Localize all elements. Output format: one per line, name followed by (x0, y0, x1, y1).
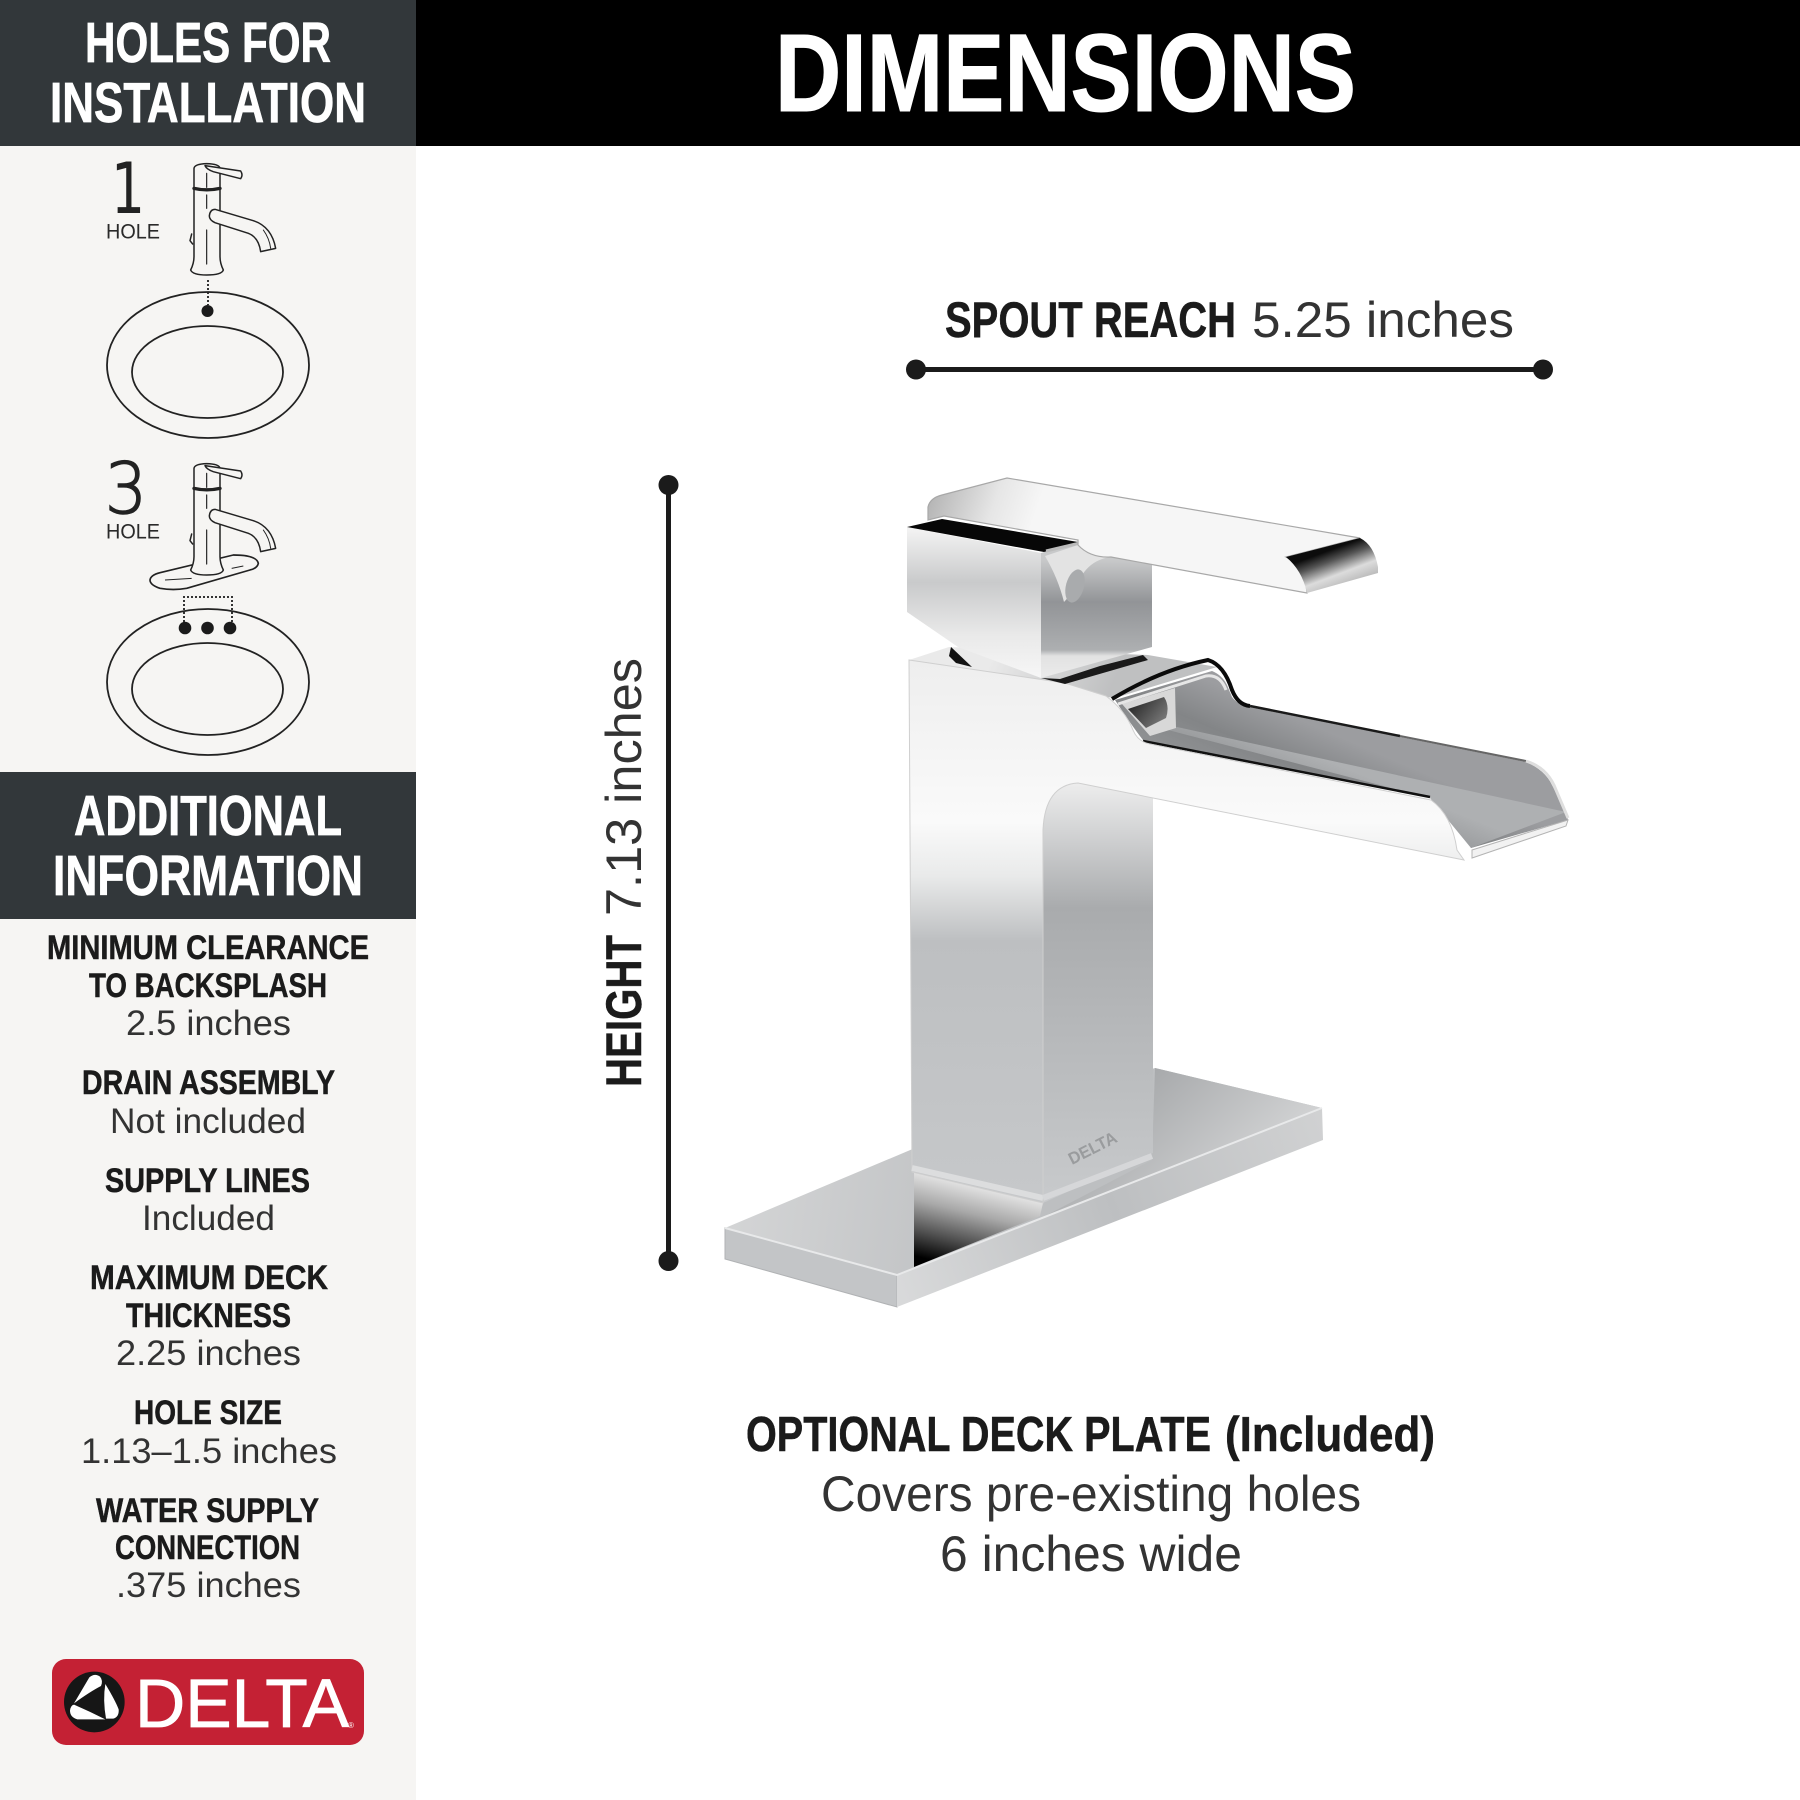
dimension: height line (658, 475, 678, 1271)
logo: delta: DELTA (135, 1665, 349, 1742)
connector: dotted bracket (184, 597, 232, 622)
heading: additional information: INFORMATION (53, 844, 363, 908)
connector: dotted drop line (207, 280, 209, 305)
handle block right face (1041, 542, 1152, 678)
text block: supply lines: SUPPLY LINES (105, 1162, 310, 1200)
text block: water supply connection: CONNECTION (115, 1529, 300, 1567)
base collar (912, 1156, 1152, 1198)
handle neck (1045, 545, 1111, 602)
handle block front face (907, 527, 1041, 678)
banner: dimensions title: DIMENSIONS (775, 12, 1356, 135)
brand mark on faucet: DELTA (1065, 1128, 1120, 1169)
slot highlight (1046, 543, 1080, 551)
icon: three holes (179, 622, 236, 634)
text block: maximum deck thickness: 2.25 inches (116, 1334, 301, 1373)
deck plate (725, 1068, 1323, 1307)
number: 3 hole (105, 448, 160, 544)
callout: optional deck plate: OPTIONAL DECK PLATE (746, 1408, 1211, 1462)
dimension: spout reach line (906, 360, 1553, 380)
callout: optional deck plate: 6 inches wide (940, 1526, 1242, 1582)
callout: optional deck plate: Covers pre-existing holes (821, 1466, 1361, 1522)
text block: water supply connection (96, 1492, 319, 1605)
heading: additional information: ADDITIONAL (74, 784, 342, 848)
text block: drain assembly (82, 1064, 335, 1141)
number: 3 hole: 3 (105, 448, 147, 530)
heading: holes for installation (0, 0, 416, 146)
icon: single hole faucet (190, 164, 276, 275)
banner: dimensions title (416, 0, 1800, 146)
icon: delta triangle emblem (64, 1672, 125, 1732)
text block: supply lines (105, 1162, 310, 1238)
lever handle (928, 478, 1378, 593)
dimension: spout reach label: SPOUT REACH (945, 292, 1236, 348)
callout: optional deck plate: (Included) (1225, 1408, 1435, 1462)
heading: holes for installation: HOLES FOR (85, 11, 331, 75)
heading: holes for installation: INSTALLATION (50, 71, 366, 135)
text block: drain assembly: DRAIN ASSEMBLY (82, 1064, 335, 1102)
dimension: spout reach label: 5.25 inches (1252, 292, 1514, 348)
collar shadow left (949, 647, 972, 667)
text block: drain assembly: Not included (110, 1102, 306, 1141)
panel: 1 hole diagram (106, 148, 309, 438)
faucet top surface (909, 647, 1217, 698)
faucet body right face (1043, 783, 1153, 1203)
number: 1 hole: 1 (111, 148, 145, 230)
text block: water supply connection: WATER SUPPLY (96, 1492, 319, 1530)
panel: 3 hole diagram (105, 448, 309, 755)
spout channel (1112, 660, 1568, 858)
logo: delta: ® (348, 1721, 354, 1730)
dimension: height label: HEIGHT (596, 935, 652, 1087)
text block: minimum clearance: 2.5 inches (126, 1004, 291, 1043)
neck socket (1062, 567, 1088, 605)
panel: left sidebar background (0, 0, 416, 1800)
text block: minimum clearance (47, 929, 369, 1043)
dimension: spout reach label (945, 292, 1514, 348)
icon: sink basin (107, 609, 309, 755)
icon: sink basin (107, 292, 309, 438)
text block: maximum deck thickness: MAXIMUM DECK (90, 1259, 328, 1297)
number: 3 hole: HOLE (106, 520, 160, 544)
heading: additional information (0, 772, 416, 919)
text block: minimum clearance: TO BACKSPLASH (89, 967, 327, 1005)
icon: deck plate under faucet (150, 555, 258, 589)
text block: hole size (81, 1394, 337, 1471)
illustration: chrome faucet (725, 478, 1568, 1307)
text block: minimum clearance: MINIMUM CLEARANCE (47, 929, 369, 967)
text block: hole size: HOLE SIZE (134, 1394, 282, 1432)
text block: water supply connection: .375 inches (116, 1566, 301, 1605)
text block: maximum deck thickness (90, 1259, 328, 1373)
text block: supply lines: Included (142, 1199, 275, 1238)
text block: hole size: 1.13–1.5 inches (81, 1432, 337, 1471)
number: 1 hole: HOLE (106, 220, 160, 244)
callout: optional deck plate (746, 1408, 1435, 1582)
text block: maximum deck thickness: THICKNESS (126, 1297, 291, 1335)
dimension: height label: 7.13 inches (596, 658, 652, 916)
logo: delta (52, 1659, 364, 1745)
icon: faucet on deck plate (190, 464, 276, 575)
handle block top slot (907, 519, 1078, 552)
collar shadow right (1041, 655, 1148, 684)
faucet body and spout front (909, 660, 1464, 1203)
icon: hole dot (202, 305, 214, 317)
dimension: height label (596, 658, 652, 1087)
